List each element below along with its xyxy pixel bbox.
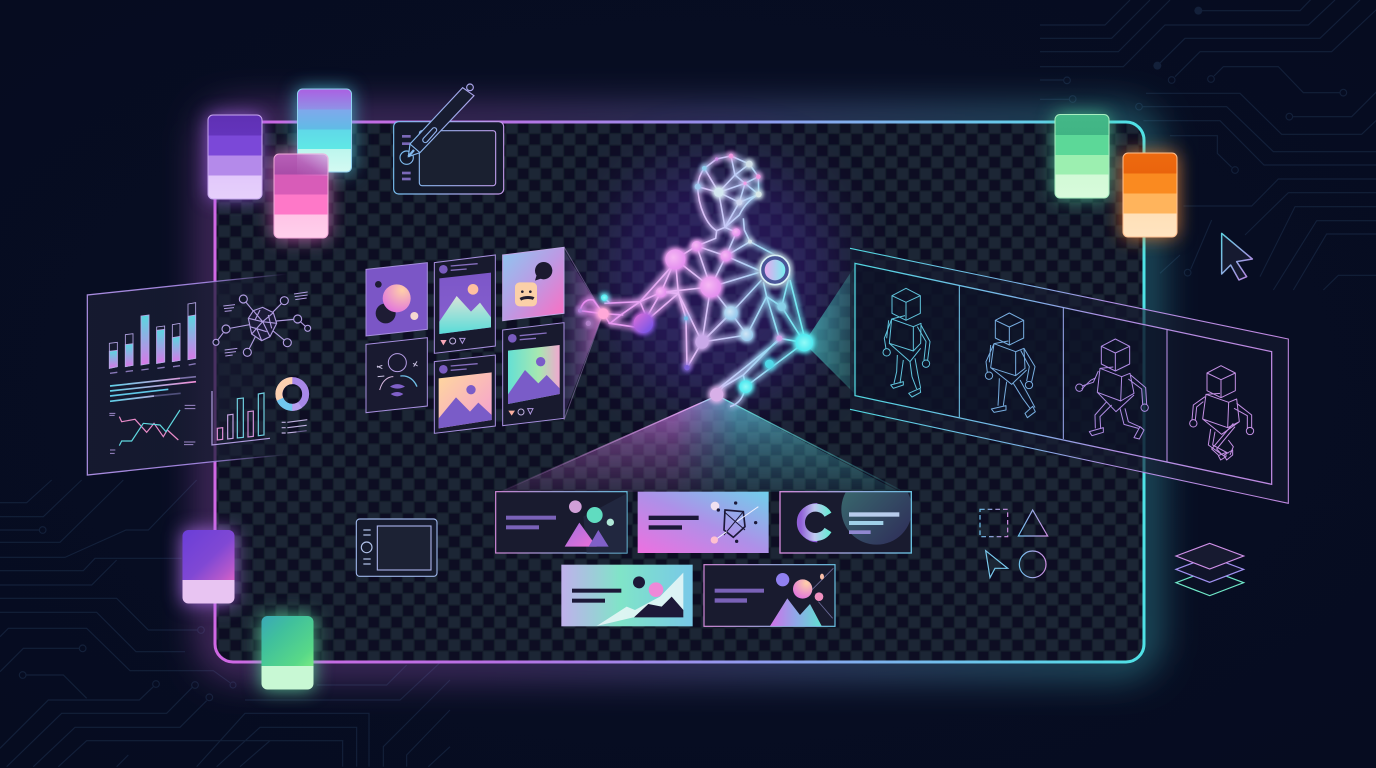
swatch: violet gradient: [182, 530, 234, 604]
card: face wireframe: [366, 338, 427, 413]
swatch: blue teal: [298, 89, 352, 172]
network nodes: [578, 154, 813, 401]
robot pose 1: [883, 288, 930, 397]
beam: hand to animation strip: [804, 263, 857, 396]
icon: triangle: [1018, 510, 1048, 536]
icon: circle: [1019, 551, 1046, 578]
neural network figure: [578, 154, 813, 407]
swatch: purple: [208, 115, 262, 199]
circuit traces: bottom left: [0, 480, 450, 767]
content thumbnails: [495, 491, 912, 627]
icon: layers: [1176, 543, 1244, 596]
beam edges: [500, 398, 900, 492]
line chart: [119, 417, 178, 440]
canvas: transparency checkerboard: [216, 123, 1143, 661]
small drawing tablet: [356, 519, 437, 576]
thumbnail 4: light gradient mountain: [561, 565, 693, 626]
thumbnail 2: gradient cube: [638, 492, 769, 553]
donut chart: [279, 381, 306, 407]
beam: figure to thumbnails: [500, 396, 900, 492]
swatch: orange: [1123, 153, 1177, 237]
figure backlight: [600, 155, 840, 405]
card: mountain post green: [503, 323, 564, 426]
shoulder ring node: [760, 255, 790, 285]
card: mountain post peach: [434, 355, 495, 433]
network lines: [580, 156, 804, 407]
drawing tablet with pen: [394, 84, 504, 194]
card: mountain post teal: [434, 255, 495, 353]
swatch: green gradient: [262, 616, 314, 690]
canvas: neon frame border: [215, 122, 1144, 662]
robot pose 4: [1190, 366, 1254, 460]
beam edge lines: [564, 247, 603, 420]
progress lines: [110, 377, 196, 401]
circuit traces: top right: [1040, 0, 1376, 290]
tool icons: [980, 509, 1244, 596]
outline bar chart: [212, 391, 270, 445]
card: abstract shapes: [366, 263, 427, 336]
robot pose 3: [1076, 339, 1148, 439]
card: chat gradient: [503, 247, 564, 321]
swatch: green: [1055, 114, 1109, 198]
bar chart: gradient columns: [109, 303, 196, 368]
frame outer glow: [215, 122, 1144, 662]
icon: pointer: [986, 551, 1008, 578]
animation strip panel: [850, 248, 1288, 503]
stylus pen: [408, 84, 474, 157]
image gallery cards: [366, 247, 564, 433]
robot pose 2: [985, 313, 1035, 418]
panel: data dashboard: [87, 273, 311, 475]
beam: gallery to hand: [562, 247, 603, 420]
thumbnail 1: dark mountain: [496, 492, 627, 553]
icon: arrow cursor: [1222, 233, 1252, 280]
swatch glows: [182, 89, 1177, 690]
thumbnail 3: logo: [779, 491, 912, 554]
swatch: pink: [274, 154, 328, 238]
thumbnail 5: dark mountain planets: [704, 565, 835, 626]
icon: dashed selection: [980, 509, 1008, 537]
network diagram: [213, 292, 311, 356]
